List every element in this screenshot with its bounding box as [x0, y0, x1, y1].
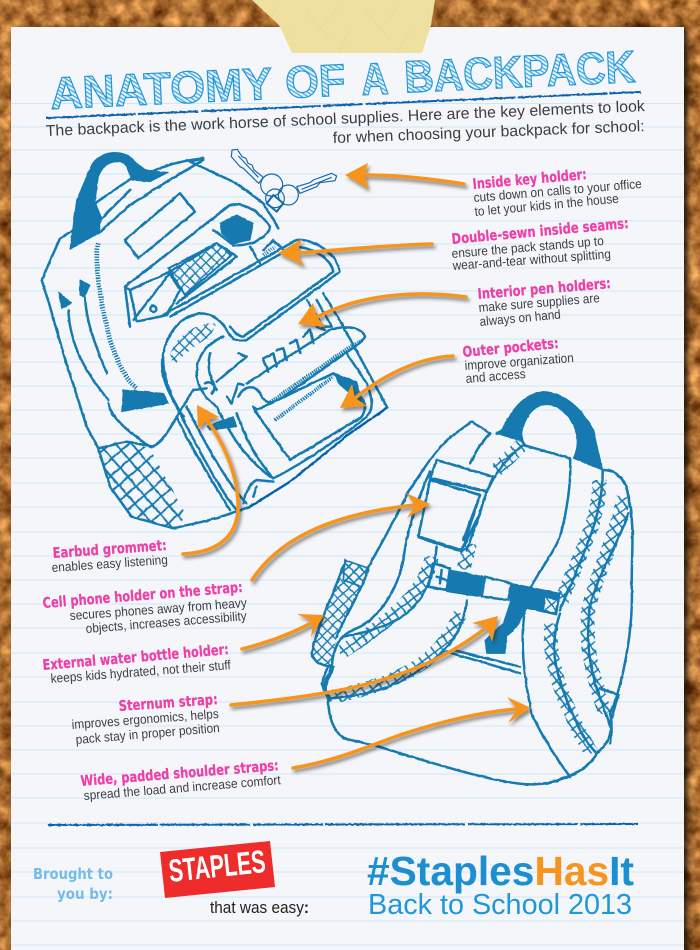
hashtag: #StaplesHasIt: [367, 848, 634, 894]
interior pen slots: [263, 300, 332, 372]
label: outer pockets: and access: [465, 366, 527, 386]
label: cell phone holder: Cell phone holder on the strap:: [42, 580, 243, 612]
side zipper: [97, 243, 137, 388]
label: cell phone holder: secures phones away from heavy: [69, 595, 248, 623]
label: outer pockets: Outer pockets:: [462, 336, 559, 361]
title: A: [360, 53, 389, 105]
bottle holder: [312, 562, 368, 667]
backpack illustration: front view with pockets: [42, 149, 387, 528]
label: sternum strap: Sternum strap:: [118, 692, 218, 715]
label: sternum strap: improves ergonomics, helps: [71, 706, 220, 732]
buckle clips: [205, 353, 247, 403]
label: interior pen holders: always on hand: [479, 307, 561, 329]
label: inside key holder: Inside key holder:: [472, 167, 587, 193]
arrow: water bottle holder: [242, 614, 324, 649]
masking tape: [252, 0, 435, 53]
body outline: [42, 158, 387, 528]
arrow: sternum strap: [231, 616, 498, 705]
label: external water bottle holder: [42, 642, 232, 686]
label: external water bottle holder: keeps kids hydrated, not their stuff: [50, 657, 232, 686]
arrow: shoulder straps: [293, 697, 531, 768]
title: BACKPACK: [403, 41, 637, 102]
label: outer pockets: improve organization: [464, 350, 574, 373]
Staples logo: [160, 841, 275, 898]
mesh window: [168, 243, 232, 295]
brought to you by: [33, 865, 113, 903]
upper flap pocket: [163, 240, 340, 417]
campaign line: Back to School 2013: [368, 889, 632, 921]
mesh bottom pocket: [98, 442, 187, 528]
backpack illustration: straps view: [312, 392, 632, 784]
brought to you by: you by:: [57, 885, 113, 903]
outer outline: [322, 470, 632, 784]
title: [49, 41, 637, 119]
label: cell phone holder: objects, increases accessibility: [85, 608, 248, 636]
title underline: [46, 92, 641, 118]
label: earbud grommet: enables easy listening: [51, 552, 168, 575]
label: double-sewn inside seams: wear-and-tear without splitting: [451, 246, 611, 273]
label: inside key holder: to let your kids in the house: [474, 191, 619, 219]
arrow: outer pockets: [340, 356, 453, 408]
label: interior pen holders: [477, 276, 611, 329]
label: interior pen holders: make sure supplies are: [478, 290, 600, 315]
Staples logo: STAPLES: [167, 843, 267, 889]
intro text: for when choosing your backpack for school:: [333, 118, 645, 147]
label: outer pockets: [462, 336, 574, 386]
label: double-sewn inside seams: ensure the pack stands up to: [451, 233, 604, 261]
tagline: that was easy: that was easy:: [210, 899, 309, 917]
footer divider: [48, 824, 638, 825]
label: earbud grommet: Earbud grommet:: [52, 538, 167, 562]
label: wide padded shoulder straps: Wide, padded shoulder straps:: [80, 758, 279, 790]
label: double-sewn inside seams: Double-sewn inside seams:: [451, 216, 629, 248]
title: OF: [284, 54, 346, 108]
label: earbud grommet: [51, 538, 168, 575]
label: interior pen holders: Interior pen holders:: [477, 276, 611, 303]
lower flap pocket: [238, 327, 365, 402]
label: inside key holder: cuts down on calls to your office: [473, 176, 642, 205]
arrow: inside seams: [278, 239, 432, 266]
label: double-sewn inside seams: [451, 216, 629, 273]
label: sternum strap: [71, 692, 220, 747]
sternum strap and buckle: [447, 570, 560, 653]
label: wide padded shoulder straps: spread the load and increase comfort: [83, 772, 282, 803]
phone pocket: [418, 460, 493, 552]
label: inside key holder: [472, 167, 642, 219]
handle: [70, 152, 168, 249]
arrow: cell phone holder: [252, 493, 430, 580]
label: external water bottle holder: External water bottle holder:: [42, 642, 229, 674]
centre seams: [447, 470, 628, 777]
side straps: [58, 280, 90, 308]
left shoulder strap: [330, 422, 490, 698]
arrow: earbud grommet: [183, 405, 238, 554]
label: sternum strap: pack stay in proper position: [75, 720, 220, 747]
main back panel: [463, 433, 570, 588]
intro text: The backpack is the work horse of school supplies. Here are the key elements to look: [45, 98, 645, 140]
name label panel: [125, 193, 195, 258]
crosshatched strap stitching: [333, 445, 623, 753]
title: ANATOMY: [49, 58, 273, 119]
arrow: pen holders: [298, 294, 466, 327]
keys: [231, 149, 337, 212]
top pocket: [125, 204, 270, 327]
zipper pull region: [263, 247, 275, 255]
label: cell phone holder: [42, 580, 248, 636]
label: wide padded shoulder straps: [80, 758, 282, 803]
arrow: key holder: [345, 163, 464, 189]
top handle: [497, 392, 603, 470]
brought to you by: Brought to: [33, 865, 113, 883]
